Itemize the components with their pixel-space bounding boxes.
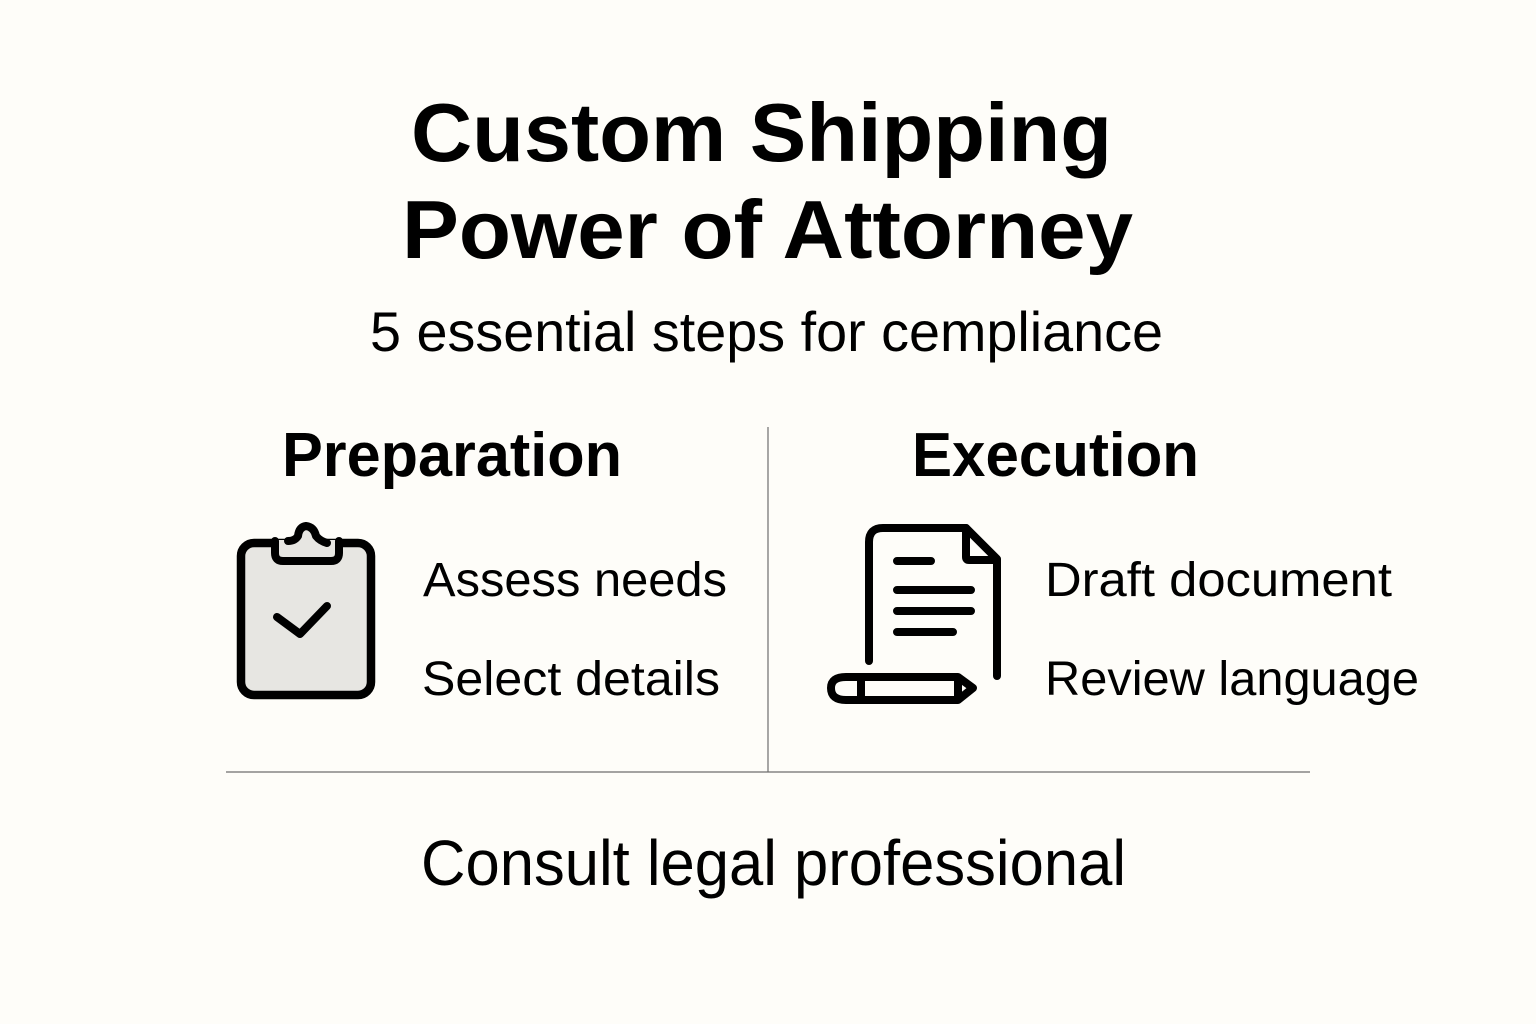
title [402,86,1133,276]
heading: preparation: Preparation [282,421,622,490]
panel: preparation [241,421,727,706]
icon: document and pencil [831,528,997,700]
footer note: Consult legal professional [421,827,1126,899]
panel: execution [831,421,1419,706]
text: draft document: Draft document [1045,554,1392,607]
heading: execution: Execution [912,421,1199,490]
title: Power of Attorney [402,183,1133,276]
text: assess needs: Assess needs [423,554,727,607]
text: select details: Select details [422,653,720,706]
icon: clipboard with check [241,526,371,695]
text: review language: Review language [1045,653,1419,706]
title: Custom Shipping [411,86,1112,179]
subtitle: 5 essential steps for cempliance [370,300,1163,363]
